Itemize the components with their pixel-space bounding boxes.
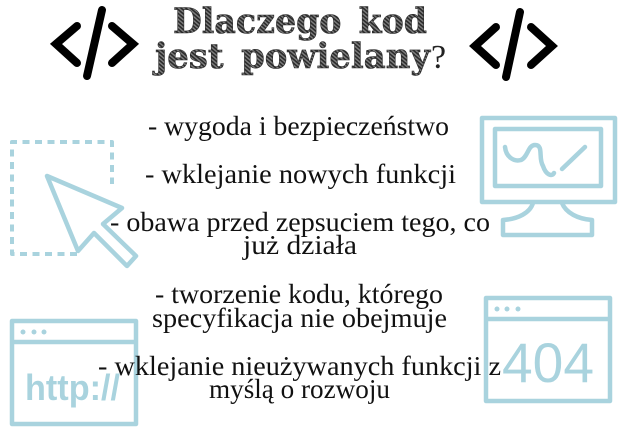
- text: reason 2: - wklejanie nowych funkcji: [145, 159, 456, 189]
- icon: left code brackets: [56, 10, 133, 76]
- title: [152, 1, 446, 77]
- icon: right code brackets: [475, 12, 552, 77]
- icon: http browser window: [12, 321, 136, 424]
- text: reason 3: [110, 207, 490, 260]
- title: jest powielany: [152, 36, 432, 77]
- icon: http browser window: http://: [25, 367, 120, 408]
- title: Dlaczego kod: [173, 1, 427, 42]
- icon: monitor: [482, 118, 615, 235]
- text: reason 4: - tworzenie kodu, którego: [155, 279, 443, 309]
- text: reason 5: - wklejanie nieużywanych funkcji z: [98, 351, 501, 381]
- icon: 404 browser window: 404: [502, 331, 594, 394]
- text: reason 3: - obawa przed zepsuciem tego, co: [110, 207, 490, 237]
- text: reason 1: - wygoda i bezpieczeństwo: [148, 111, 449, 141]
- text: reason 3: już działa: [242, 230, 357, 260]
- title: ?: [431, 39, 446, 76]
- icon: cursor with dashed selection: [12, 142, 136, 266]
- text: reason 4: specyfikacja nie obejmuje: [152, 303, 447, 333]
- text: reason 5: myślą o rozwoju: [209, 374, 390, 404]
- text: reason 5: [98, 351, 501, 404]
- text: reason 4: [152, 279, 447, 333]
- icon: 404 browser window: [486, 298, 610, 401]
